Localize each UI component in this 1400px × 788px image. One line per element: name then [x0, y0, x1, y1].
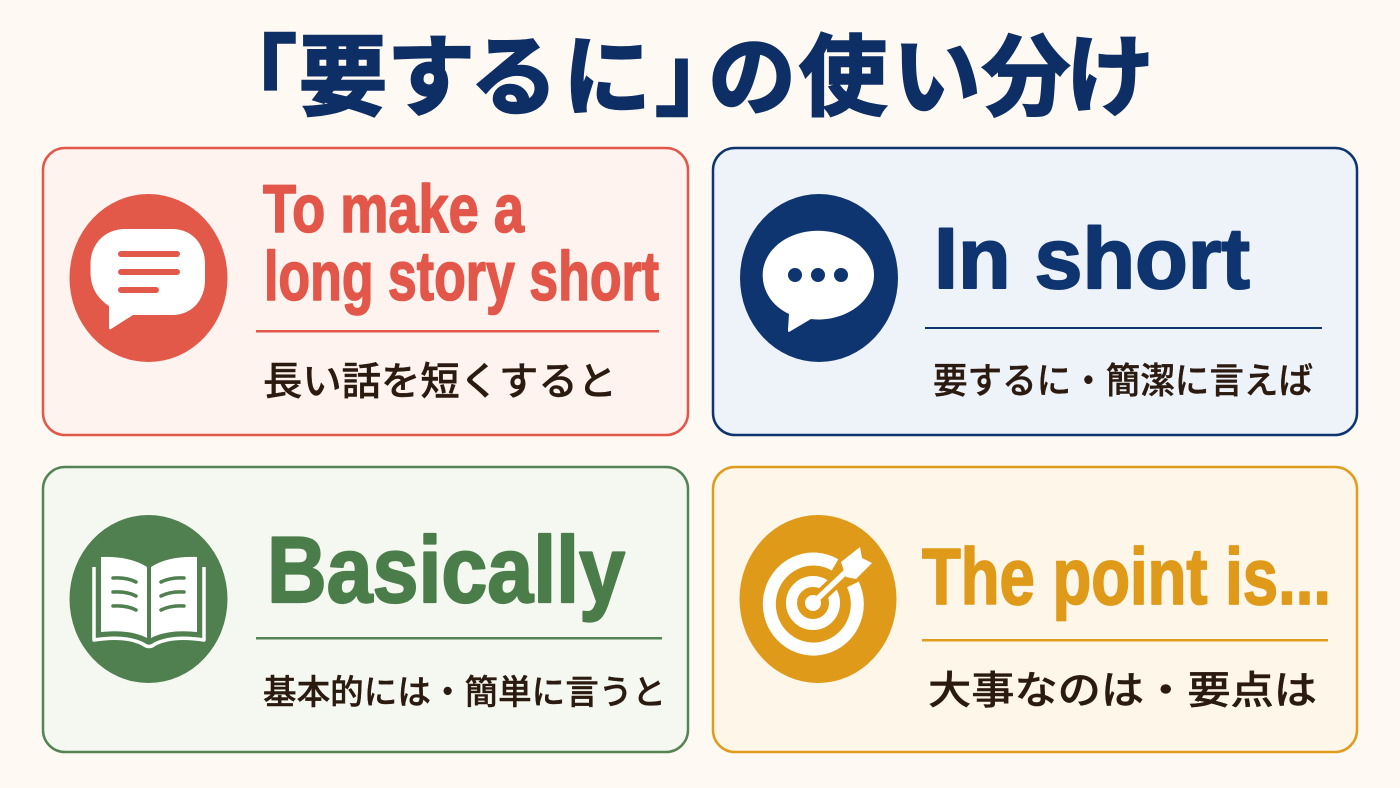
icon: open book	[70, 515, 228, 683]
english heading: Basically	[267, 517, 625, 622]
card background	[713, 148, 1357, 435]
title: 「要するに」の使い分け	[209, 28, 1154, 127]
english heading	[263, 171, 659, 315]
japanese translation: 大事なのは・要点は	[928, 670, 1317, 713]
english heading: To make a	[263, 171, 525, 247]
icon: speech bubble with lines	[70, 194, 228, 362]
icon: speech bubble with dots	[740, 194, 898, 362]
panel: To make a long story short	[43, 148, 688, 435]
english heading: long story short	[264, 237, 659, 315]
card background	[43, 148, 688, 435]
panel: Basically	[43, 467, 688, 752]
icon: target with arrow	[740, 515, 896, 683]
card background	[43, 467, 688, 752]
japanese translation: 基本的には・簡単に言うと	[263, 674, 666, 712]
card background	[713, 467, 1357, 752]
japanese translation: 要するに・簡潔に言えば	[933, 360, 1313, 401]
japanese translation: 長い話を短くすると	[263, 361, 617, 404]
panel: In short	[713, 148, 1357, 435]
english heading: In short	[934, 211, 1250, 307]
panel: The point is...	[713, 467, 1357, 752]
